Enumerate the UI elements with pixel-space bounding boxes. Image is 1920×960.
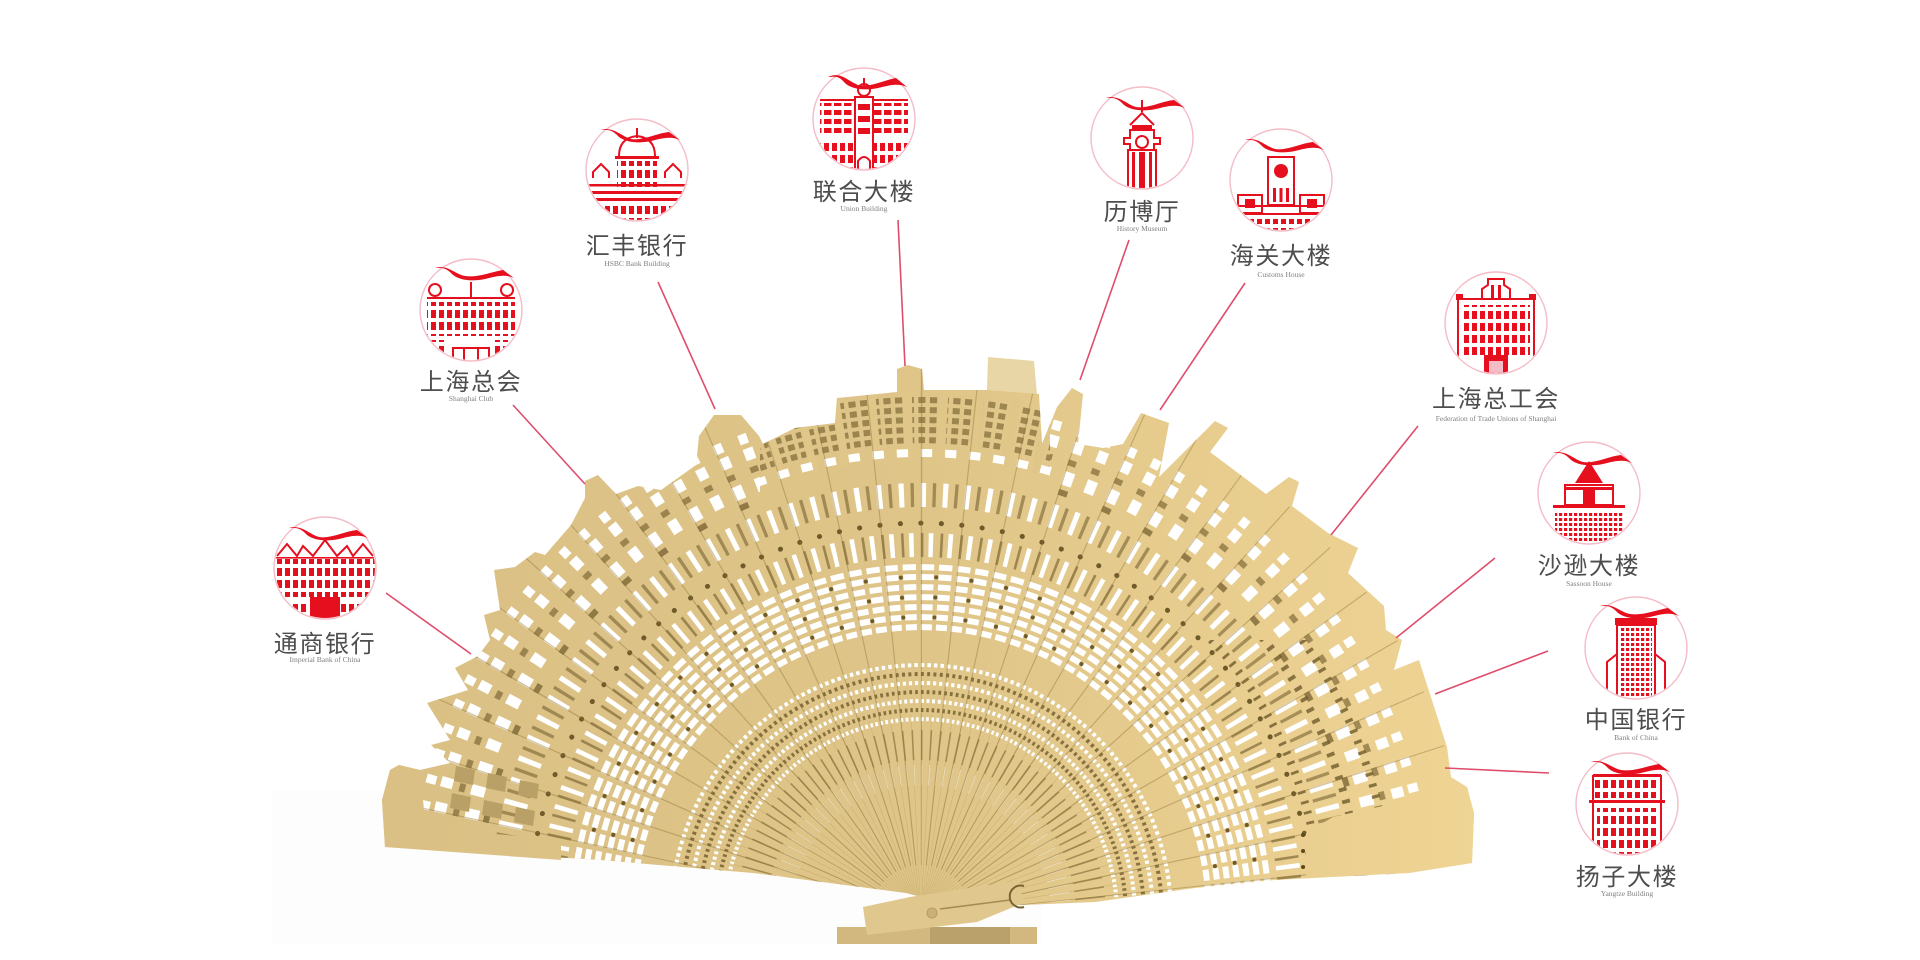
english name: Customs House — [1257, 270, 1305, 279]
icon: ribbon — [1600, 605, 1679, 618]
faint ground shadow — [272, 790, 1042, 945]
hinge guard stick — [863, 880, 1023, 935]
name: 历博厅 — [1104, 199, 1180, 226]
name: 沙逊大楼 — [1538, 553, 1640, 580]
icon: Imperial Bank building — [273, 517, 377, 620]
left end stick — [382, 765, 561, 860]
badge: Sassoon House — [1538, 442, 1640, 588]
infographic: Bund buildings on a folding fan — [273, 67, 1688, 944]
right end stick — [1306, 787, 1474, 878]
icon: ribbon — [828, 75, 907, 89]
english name: Yangtze Building — [1601, 889, 1653, 898]
name: 上海总会 — [420, 369, 522, 396]
hinge line — [940, 900, 1010, 909]
crescent mark — [1010, 886, 1024, 907]
icon: ribbon — [601, 129, 680, 142]
english name: Sassoon House — [1566, 579, 1612, 588]
badge: Yangtze Building — [1576, 753, 1678, 898]
hinge rivet — [927, 908, 937, 918]
name: 联合大楼 — [813, 179, 915, 206]
pale tall building behind skyline — [986, 357, 1042, 450]
name: 通商银行 — [274, 631, 376, 658]
name: 扬子大楼 — [1576, 864, 1678, 891]
english name: HSBC Bank Building — [604, 259, 670, 268]
icon: Sassoon House — [1538, 442, 1640, 544]
icon: Yangtze Building — [1576, 753, 1678, 856]
icon: Customs House — [1230, 129, 1332, 232]
icon: HSBC building — [585, 119, 689, 221]
leader lines — [386, 220, 1549, 773]
icon: ribbon — [1553, 452, 1632, 465]
icon: ribbon — [1106, 97, 1185, 110]
name: 汇丰银行 — [586, 233, 688, 260]
badge: Imperial Bank of China — [273, 517, 377, 664]
icon: ribbon — [435, 267, 514, 280]
icon: ribbon — [1591, 761, 1670, 774]
badge: Federation of Trade Unions — [1432, 272, 1560, 423]
icon: clock tower — [1091, 87, 1193, 190]
english name: Shanghai Club — [449, 394, 493, 403]
icon: Union federation building — [1445, 272, 1547, 375]
icon: Shanghai Club building — [420, 259, 522, 362]
badge: Customs House — [1230, 129, 1332, 279]
icon: ribbon — [289, 527, 368, 540]
english name: Union Building — [841, 204, 888, 213]
badge: Bank of China — [1585, 597, 1687, 742]
badge: Shanghai Club — [420, 259, 522, 403]
icon: ribbon — [1245, 139, 1324, 152]
name: 海关大楼 — [1230, 243, 1332, 270]
english name: Bank of China — [1614, 733, 1659, 742]
icon: Bank of China — [1585, 597, 1687, 700]
right stick dots — [1301, 835, 1305, 867]
badge: History Museum — [1091, 87, 1193, 233]
badge: Union Building — [813, 68, 915, 213]
english name: History Museum — [1117, 224, 1167, 233]
badge: HSBC Bank Building — [585, 119, 689, 268]
english name: Imperial Bank of China — [289, 655, 361, 664]
stand base — [837, 927, 1037, 944]
english name: Federation of Trade Unions of Shanghai — [1436, 414, 1556, 423]
icon: Union Building — [813, 68, 915, 171]
folding fan with building skyline — [370, 357, 1490, 935]
name: 中国银行 — [1585, 707, 1687, 734]
left end windows — [450, 766, 539, 826]
fan silhouette with cut-out windows — [370, 360, 1490, 930]
name: 上海总工会 — [1432, 386, 1560, 413]
